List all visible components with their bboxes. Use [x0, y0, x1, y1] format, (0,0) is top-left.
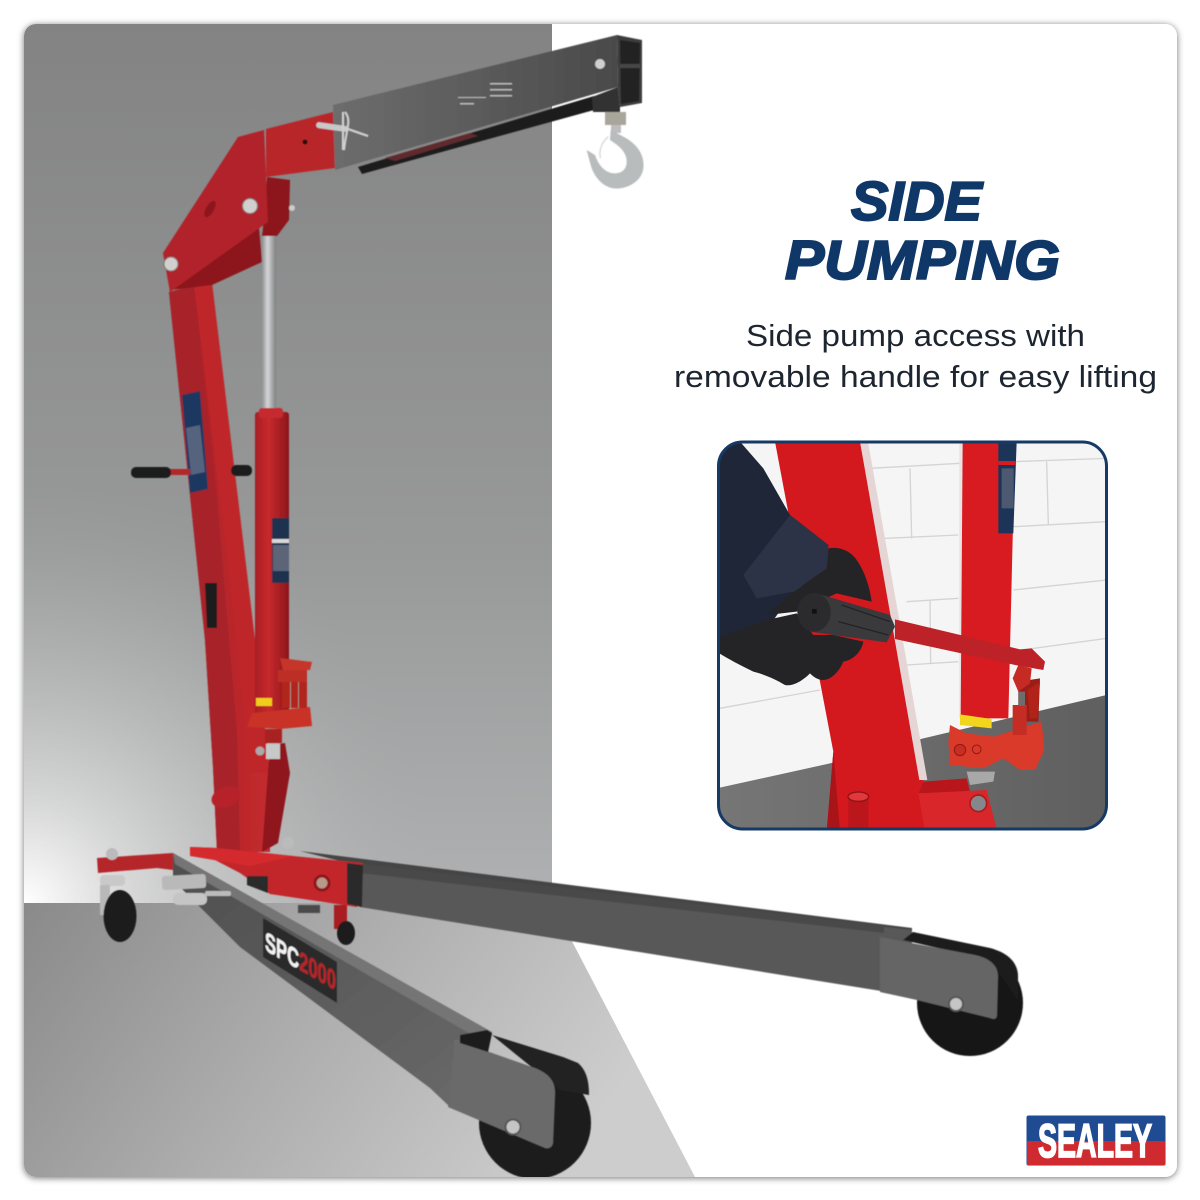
boom red section — [266, 112, 335, 177]
base red frame — [189, 846, 364, 908]
description text — [674, 318, 1157, 394]
red hydraulic cylinder — [960, 444, 962, 718]
floor — [717, 695, 1107, 832]
handle bar — [895, 619, 1045, 670]
inset photo: hand pumping the side handle — [710, 435, 1115, 840]
title: PUMPING — [785, 229, 1060, 291]
right leg wheel — [917, 950, 1023, 1056]
T handle — [131, 465, 252, 478]
crane head plate — [163, 130, 295, 292]
left leg with SPC2000 branding — [162, 853, 591, 1179]
icon: lifting hook — [587, 112, 644, 189]
description text: Side pump access with — [746, 318, 1085, 353]
pump linkage — [1018, 678, 1040, 722]
locking pin — [316, 122, 348, 132]
grip — [810, 593, 895, 642]
yellow warning label — [960, 714, 992, 728]
hydraulic ram rod — [262, 198, 276, 412]
pump assembly — [247, 658, 312, 743]
right leg — [300, 851, 1023, 1056]
engine crane product — [97, 35, 1023, 1179]
inset frame — [718, 442, 1106, 829]
hydraulic cylinder — [255, 408, 289, 714]
glove — [717, 548, 872, 685]
pump base — [948, 722, 1044, 770]
brick wall — [720, 444, 1105, 788]
SPC2000 plate — [263, 918, 337, 1003]
locking bolts — [162, 874, 231, 905]
panel: studio backdrop — [24, 24, 695, 1177]
red column — [775, 442, 927, 832]
SPC2000 plate: SPC2000 — [265, 927, 336, 997]
cylinder label — [272, 518, 289, 583]
boom grey extension — [316, 35, 642, 174]
rear caster — [298, 905, 355, 945]
capacity markings — [458, 83, 512, 104]
left leg wheel — [479, 1067, 591, 1179]
title: SIDE — [851, 170, 984, 232]
description text: removable handle for easy lifting — [674, 359, 1157, 394]
front left caster — [97, 848, 173, 942]
column label — [182, 391, 208, 493]
sleeve — [717, 442, 828, 645]
title — [785, 170, 1060, 291]
column — [169, 283, 290, 852]
column peg — [210, 786, 238, 808]
